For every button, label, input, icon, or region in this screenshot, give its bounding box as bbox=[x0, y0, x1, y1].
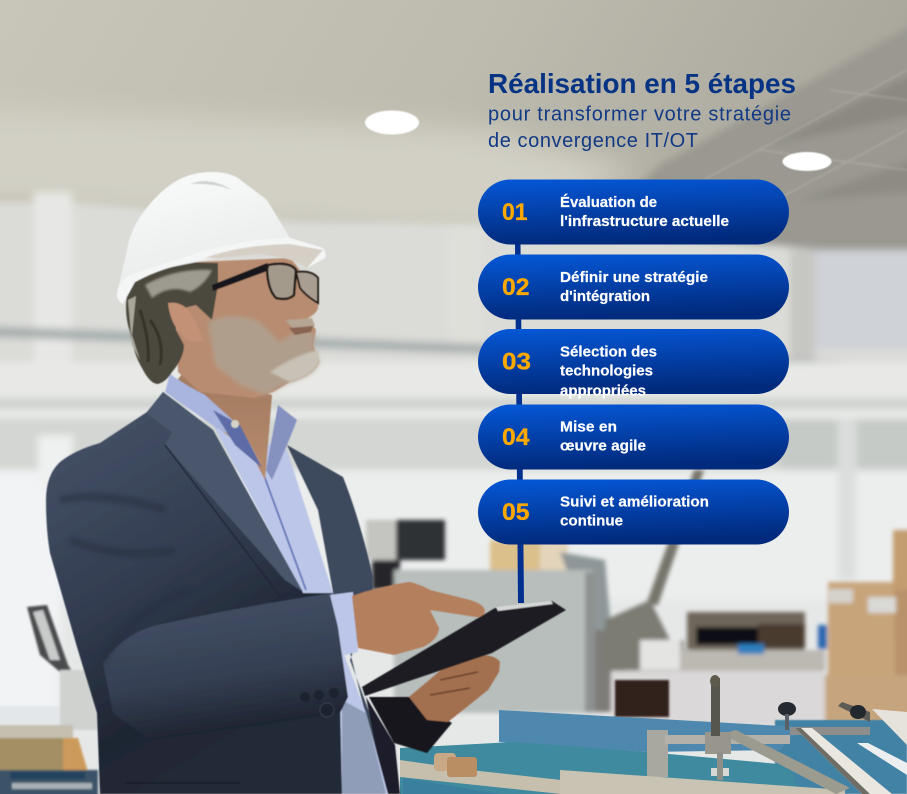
glasses bbox=[212, 263, 318, 303]
step 04 bbox=[478, 404, 789, 470]
step 01: Évaluation de bbox=[560, 194, 657, 211]
lapel bbox=[147, 392, 303, 592]
jacket back and body bbox=[46, 392, 345, 794]
step 03 bbox=[478, 329, 789, 400]
collar bbox=[165, 374, 266, 470]
step 05 bbox=[478, 480, 789, 544]
step 03: 03 bbox=[502, 348, 531, 376]
shoulder folds bbox=[60, 497, 190, 665]
ear bbox=[168, 303, 204, 342]
step 02: d'intégration bbox=[560, 288, 650, 305]
foreground: conveyor bbox=[400, 675, 907, 794]
face bbox=[176, 258, 319, 398]
neck bbox=[170, 370, 272, 480]
step 03: appropriées bbox=[560, 382, 646, 400]
step 01: 01 bbox=[502, 199, 528, 226]
jacket right panel bbox=[287, 445, 400, 794]
step 02: 02 bbox=[502, 274, 530, 301]
step 05: 05 bbox=[502, 499, 530, 526]
step 01: l'infrastructure actuelle bbox=[560, 213, 729, 230]
step 03: technologies bbox=[560, 362, 653, 380]
step 03: Sélection des bbox=[560, 344, 657, 360]
background: left shelf and equipment bbox=[0, 605, 100, 794]
sleeve buttons bbox=[300, 688, 339, 717]
step 04: Mise en bbox=[560, 418, 617, 436]
title block bbox=[488, 68, 796, 152]
beard bbox=[208, 316, 319, 395]
mouth bbox=[289, 326, 313, 335]
step 02 bbox=[478, 254, 789, 320]
subtitle line 1: pour transformer votre stratégie bbox=[488, 104, 791, 126]
step 02: Définir une stratégie bbox=[560, 269, 708, 286]
step 05: Suivi et amélioration bbox=[560, 494, 709, 510]
lower sleeve bbox=[369, 697, 452, 753]
dark lower jacket bbox=[366, 697, 400, 794]
subtitle line 2: de convergence IT/OT bbox=[488, 130, 698, 152]
shirt cuff bbox=[330, 592, 358, 655]
ceiling lights bbox=[365, 110, 832, 171]
shirt bbox=[213, 425, 388, 794]
step 01 bbox=[478, 180, 789, 244]
helmet bbox=[117, 172, 326, 304]
sleeve bbox=[103, 593, 348, 740]
hair bbox=[126, 262, 218, 384]
connector line bbox=[515, 244, 524, 603]
step 04: œuvre agile bbox=[560, 438, 646, 454]
pocket flap bbox=[125, 782, 240, 784]
heading: Réalisation en 5 étapes bbox=[488, 68, 796, 99]
man in hard hat bbox=[46, 172, 566, 794]
lower hand bbox=[409, 655, 500, 722]
background: machines and boxes bbox=[366, 470, 907, 726]
helmet brim bbox=[117, 238, 326, 304]
step 04: 04 bbox=[502, 424, 530, 451]
upper hand bbox=[352, 582, 485, 655]
step 05: continue bbox=[560, 512, 623, 530]
tablet bbox=[362, 601, 566, 696]
